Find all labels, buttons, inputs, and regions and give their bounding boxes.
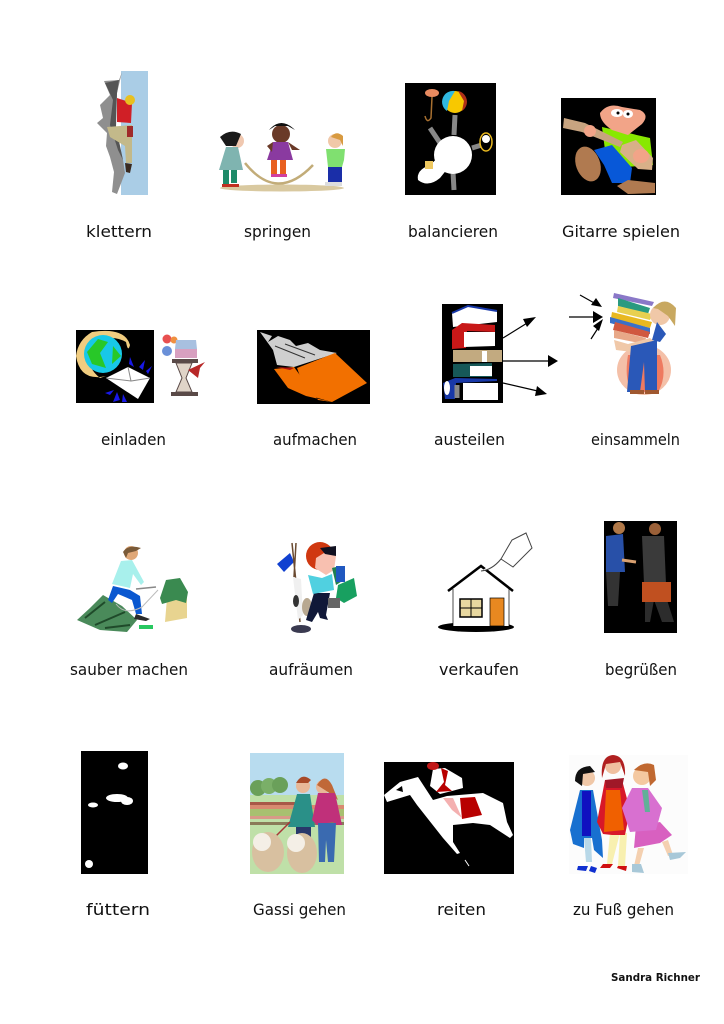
credit: Sandra Richner xyxy=(611,971,701,984)
labels: springen xyxy=(244,222,311,241)
icon: austeilen xyxy=(442,304,558,403)
icon: Gassi gehen xyxy=(250,753,344,874)
labels: balancieren xyxy=(408,222,498,241)
icon: füttern xyxy=(81,751,148,874)
labels: Gitarre spielen xyxy=(562,222,680,241)
icon: klettern xyxy=(97,71,148,195)
labels: füttern xyxy=(86,900,150,919)
labels: einsammeln xyxy=(591,430,680,449)
labels: austeilen xyxy=(434,430,505,449)
labels: verkaufen xyxy=(439,660,519,679)
labels: zu Fuß gehen xyxy=(573,900,674,919)
labels: klettern xyxy=(86,222,152,241)
icon: einsammeln xyxy=(569,293,676,395)
icon: einladen xyxy=(76,330,205,403)
icon: springen xyxy=(219,123,345,192)
labels: einladen xyxy=(101,430,166,449)
labels: aufräumen xyxy=(269,660,353,679)
labels xyxy=(70,222,680,919)
icon: reiten xyxy=(384,762,514,874)
icon: begrüßen xyxy=(604,521,677,633)
labels: aufmachen xyxy=(273,430,357,449)
labels: reiten xyxy=(437,900,486,919)
icon: Gitarre spielen xyxy=(561,98,656,195)
icon: zu Fuß gehen xyxy=(569,755,688,874)
labels: Gassi gehen xyxy=(253,900,346,919)
labels: sauber machen xyxy=(70,660,188,679)
icon: aufmachen xyxy=(257,330,370,404)
icon: aufräumen xyxy=(277,542,357,633)
labels: begrüßen xyxy=(605,660,677,679)
icon: balancieren xyxy=(405,83,496,195)
icon: sauber machen xyxy=(77,546,188,632)
icon: verkaufen xyxy=(438,533,532,632)
